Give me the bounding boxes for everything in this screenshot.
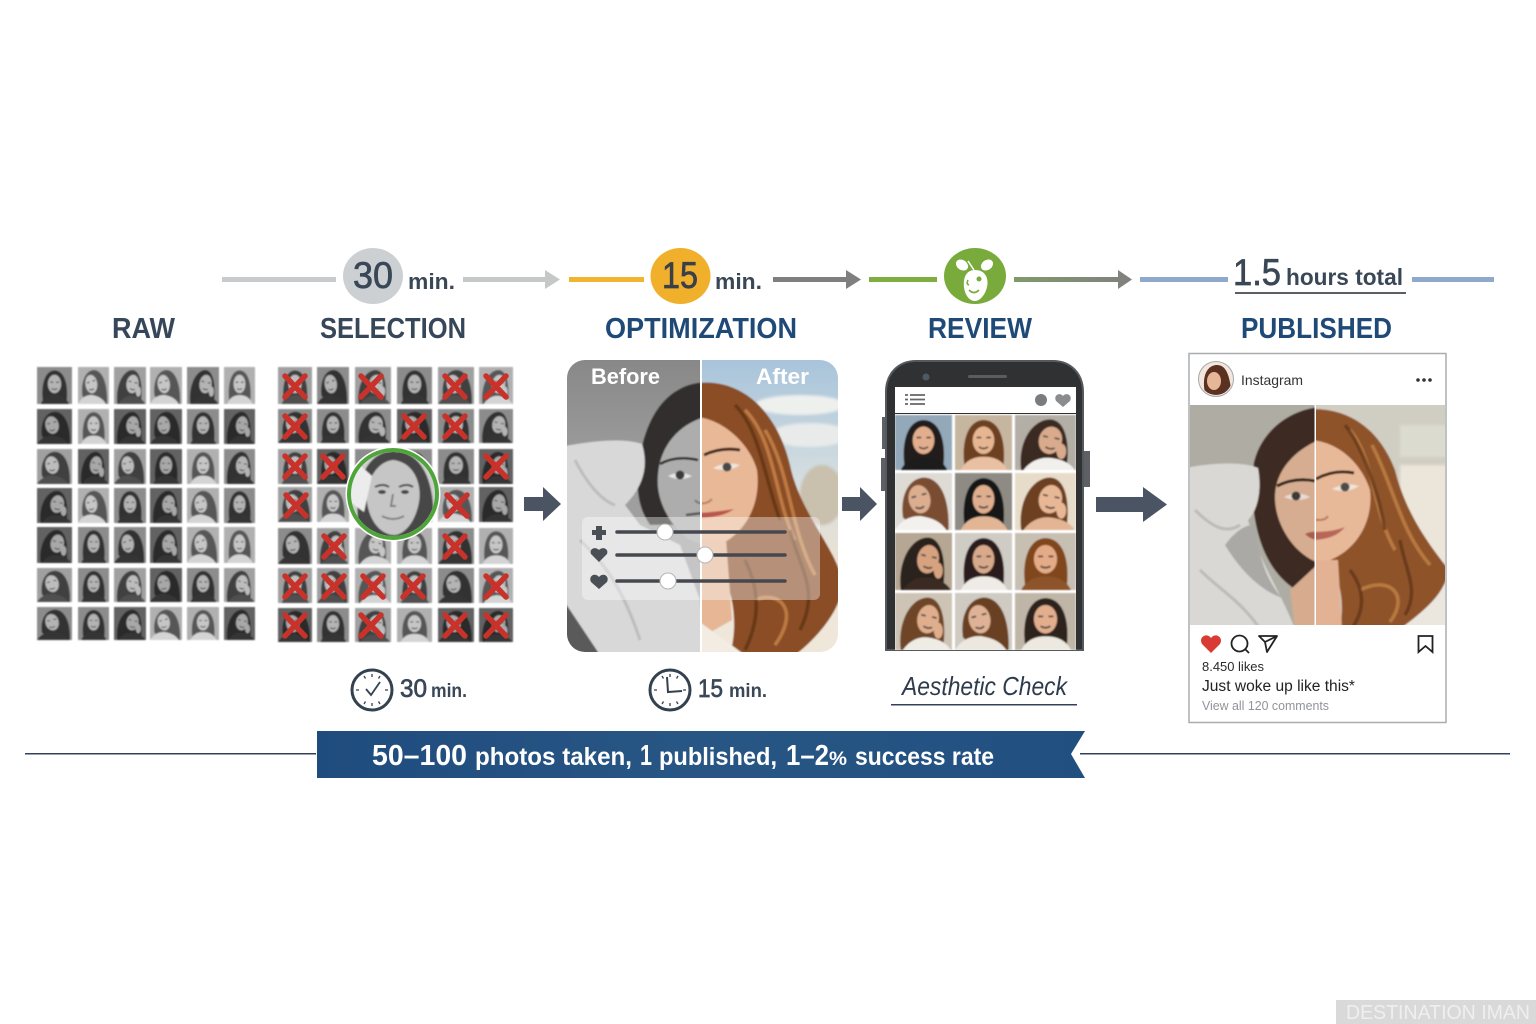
label: min.: min. [408, 269, 455, 294]
rule: right of banner [1080, 753, 1510, 754]
post photo [1186, 401, 1449, 629]
badge: 15: 15 [662, 255, 698, 296]
label: 1.5 hours total: hours total [1286, 264, 1403, 290]
banner text: success rate [855, 743, 994, 771]
banner text: photos taken, [475, 743, 632, 771]
banner text: 50–100 [372, 740, 467, 772]
panel: published instagram post [1186, 354, 1449, 722]
adjustment sliders overlay [582, 517, 820, 600]
post caption: Just woke up like this* [1202, 678, 1355, 695]
panel: phone review gallery [881, 361, 1090, 650]
phone side buttons [881, 417, 1090, 491]
badge: 30: 30 [353, 255, 393, 296]
arrow: to review [773, 270, 861, 289]
arrow: review to published [1096, 487, 1167, 522]
arrow: optimization to review [842, 487, 877, 521]
watermark: DESTINATION IMAN [1346, 1002, 1530, 1024]
phone body [886, 361, 1083, 650]
banner text [372, 740, 994, 772]
timeline: review segment [869, 248, 1132, 304]
arrow: selection to optimization [524, 487, 561, 521]
selection time: 30 min [352, 670, 467, 710]
panel: before and after optimization [560, 355, 850, 655]
panel: raw photo grid [37, 367, 255, 640]
arrow: to optimization [463, 270, 560, 289]
after half [702, 360, 838, 652]
account name: Instagram [1241, 372, 1303, 388]
timeline: 30 min segment [222, 248, 560, 304]
label: After: After [756, 364, 809, 389]
heading: PUBLISHED: PUBLISHED [1241, 313, 1392, 345]
rule: left of banner [25, 753, 316, 754]
panel: selection photo grid [278, 367, 513, 642]
badge: 30 [343, 248, 403, 304]
icon: clock with check [352, 670, 392, 710]
phone app header [895, 387, 1076, 413]
timeline: 15 min segment [569, 248, 861, 304]
label: min.: min. [715, 269, 762, 294]
optimization time: 15 min: min. [729, 681, 767, 702]
red rejection crosses [285, 376, 506, 636]
banner text: published, [659, 743, 777, 771]
post action icons [1201, 635, 1432, 653]
phone photo grid [895, 414, 1076, 650]
icon: clock [650, 670, 690, 710]
heading: OPTIMIZATION: OPTIMIZATION [605, 313, 797, 345]
banner text: % [829, 749, 847, 770]
optimization time: 15 min [650, 670, 767, 710]
divider [700, 360, 702, 652]
heading: RAW: RAW [112, 313, 176, 345]
label: Before: Before [591, 364, 660, 389]
review note: Aesthetic Check: Aesthetic Check [900, 671, 1069, 701]
selection thumbnails [278, 367, 513, 642]
heading: SELECTION: SELECTION [320, 313, 466, 345]
banner text: 1 [640, 740, 652, 772]
heading: REVIEW: REVIEW [928, 313, 1033, 345]
icon: green review badge [944, 248, 1006, 304]
selection time: 30 min: min. [431, 681, 467, 702]
optimization time: 15 min: 15 [698, 675, 723, 703]
timeline: total time [1140, 252, 1494, 294]
before half [567, 360, 700, 652]
selected portrait in green ring [346, 446, 440, 542]
label: 1.5 hours total: 1.5 [1233, 252, 1281, 293]
arrow: to published [1014, 270, 1132, 289]
selection time: 30 min: 30 [400, 675, 427, 703]
banner text: 1–2 [786, 740, 829, 772]
banner: summary [317, 731, 1085, 778]
badge: 15 [650, 248, 710, 304]
post header [1198, 362, 1432, 398]
label: 1.5 hours total [1233, 252, 1406, 294]
post likes: 8.450 likes [1202, 659, 1264, 674]
post comments: View all 120 comments [1202, 699, 1329, 713]
